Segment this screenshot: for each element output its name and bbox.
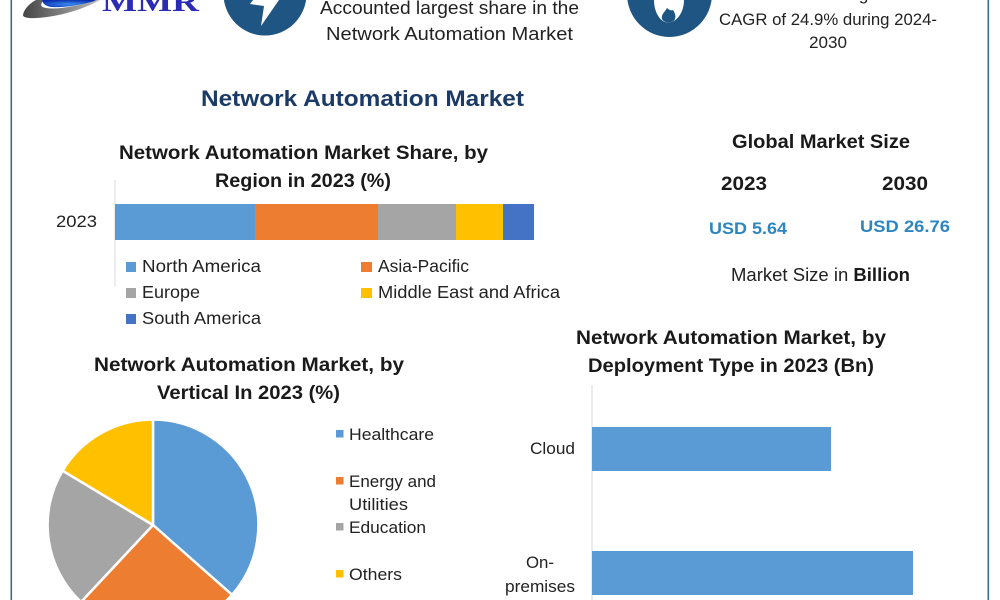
legend: verticals: Others — [349, 566, 402, 584]
callout: largest share — [320, 0, 579, 44]
heading: region chart — [119, 143, 488, 192]
callout: largest share: Network Automation Market — [326, 23, 573, 44]
heading: deployment chart: Deployment Type in 2023 (Bn) — [588, 356, 874, 377]
heading: global market size: Global Market Size — [732, 132, 910, 153]
bar: cloud — [592, 427, 831, 471]
bar: on-premises — [592, 551, 913, 595]
category labels: premises — [505, 578, 575, 596]
category labels: On- — [526, 554, 554, 572]
year labels — [721, 173, 928, 195]
heading: deployment chart — [576, 328, 886, 377]
legend: regions: Asia-Pacific — [378, 256, 469, 276]
category labels — [505, 440, 575, 596]
market values — [709, 217, 950, 238]
pie chart — [48, 420, 258, 600]
heading: vertical chart: Network Automation Market, by — [94, 355, 404, 376]
legend: verticals: Education — [349, 519, 426, 537]
axis label: 2023: 2023 — [56, 212, 97, 231]
callout: CAGR: 2030 — [809, 34, 847, 52]
legend: regions: Europe — [142, 282, 200, 302]
heading: vertical chart: Vertical In 2023 (%) — [157, 383, 340, 404]
market values: USD 5.64 — [709, 219, 788, 238]
legend: regions: Middle East and Africa — [378, 282, 560, 302]
legend: verticals — [336, 426, 436, 584]
callout: CAGR — [719, 0, 937, 52]
heading: region chart: Network Automation Market Share, by — [119, 143, 488, 164]
year labels: 2023 — [721, 173, 767, 195]
panel: global market size — [709, 132, 950, 285]
icon: lightning bolt — [224, 0, 306, 36]
logo: MMR — [23, 0, 200, 18]
legend: verticals: Energy and — [349, 473, 436, 491]
legend: regions: North America — [142, 256, 261, 276]
stacked bar chart — [115, 204, 534, 240]
heading: region chart: Region in 2023 (%) — [215, 171, 391, 192]
legend: regions: South America — [142, 308, 261, 328]
note: market size unit: Market Size in Billion — [731, 265, 910, 285]
legend: verticals: Healthcare — [349, 426, 434, 444]
year labels: 2030 — [882, 173, 928, 195]
legend: regions — [126, 256, 560, 328]
category labels: Cloud — [530, 440, 575, 458]
market values: USD 26.76 — [860, 217, 950, 236]
legend: verticals: Utilities — [349, 496, 408, 514]
heading: deployment chart: Network Automation Market, by — [576, 328, 886, 349]
heading: vertical chart — [94, 355, 404, 404]
icon: flame — [627, 0, 712, 37]
panel: deployment type bar chart — [505, 328, 913, 600]
title: Network Automation Market — [201, 86, 525, 111]
callout: CAGR: CAGR of 24.9% during 2024- — [719, 11, 937, 29]
panel: market share by region — [56, 143, 560, 328]
panel: vertical pie chart — [48, 355, 436, 600]
